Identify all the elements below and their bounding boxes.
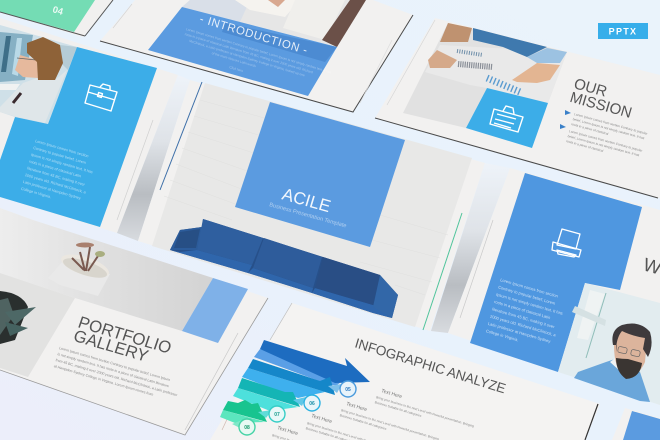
blue accent block: [182, 278, 248, 343]
photo: man in profile: [0, 25, 77, 124]
chart: arrow funnel: [220, 340, 370, 435]
panel: bottom right slide corner: [612, 408, 660, 440]
blue panel: [148, 7, 337, 96]
text block: item one: Bring your business to the next Level with Powerful presentation. Bringing: [376, 395, 475, 428]
text block: left slide body: College in Virginia.: [20, 187, 52, 199]
text block: introduction body: Click here: [229, 65, 244, 73]
text block: right slide body: 2000 years old. Richard McClintock, a: [490, 314, 557, 338]
photo: bearded man: [558, 283, 660, 405]
text block: item two: Business Suitable for all categories: [339, 413, 387, 431]
sofa: [170, 219, 398, 318]
text block: left slide body: Contrary to popular belief, Lorem: [33, 146, 86, 165]
text block: right slide body: roots in a piece of classical Latin: [494, 299, 551, 320]
heading: introduction: - INTRODUCTION -: [198, 13, 309, 57]
panel: center title slide: [138, 80, 485, 331]
text block: left slide body: Latin professor at Hampden-Sydney: [22, 180, 81, 200]
photo: succulent on pedestal: [0, 208, 213, 331]
text block: mission body: roots in a piece of classical: [566, 139, 604, 153]
text block: item three: [305, 413, 394, 440]
tie: [13, 93, 21, 103]
panel: right blue slide: [448, 168, 660, 405]
text block: mission body: Lorem Ipsum comes from section Contrary to popular: [574, 112, 649, 136]
blue panel: [0, 47, 157, 227]
panel: portfolio gallery slide: [0, 208, 268, 435]
panel: green slide: [0, 0, 113, 37]
text block: left slide body: 2000 years old. Richard McClintock, a: [25, 173, 87, 195]
text block: mission body: roots in a piece of classical: [571, 122, 609, 136]
text block: item four: Text Here: [276, 425, 299, 437]
shirt: [0, 70, 67, 123]
icon: clipboard: [490, 106, 523, 132]
circle labels: [239, 381, 356, 435]
heading: portfolio gallery: GALLERY: [71, 326, 151, 366]
text block: left slide body: Lorem Ipsum comes from section: [35, 139, 89, 158]
circle labels: 05: [345, 387, 351, 393]
text block: right slide body: Ipsum is not simply random text. It has: [496, 292, 563, 316]
badge: PPTX: [598, 23, 648, 39]
text block: item one: Text Here: [380, 388, 403, 400]
heading: portfolio gallery: PORTFOLIO: [76, 313, 174, 358]
heading: our mission: MISSION: [568, 89, 634, 122]
text block: introduction body: McClintock, a Latin professor at Hampden-Sydney College in Virginia, looked up one: [189, 39, 306, 77]
text block: introduction body: of the more obscure Latin words: [211, 51, 257, 68]
shadow: between center and right slide: [431, 163, 510, 333]
circle labels: 07: [274, 412, 280, 418]
text block: mission body: belief, Lorem Ipsum is not simply random text. It has: [572, 117, 645, 140]
text block: left slide body: roots in a piece of classical Latin: [29, 160, 82, 178]
hair: [27, 37, 63, 80]
blue title card: [235, 102, 405, 247]
text block: introduction body: Lorem Ipsum comes from section Contrary to popular belief, Lorem Ipsum is not simply random text. It has: [186, 27, 332, 75]
text block: item four: [272, 425, 328, 440]
photo: brick wall: [152, 83, 472, 327]
text block: item three: Text Here: [310, 413, 333, 425]
badge: PPTX: PPTX: [609, 26, 637, 36]
text block: portfolio body: from 45 BC, making it over 2000 years old. Richard McClintock, a Latin professor: [55, 358, 178, 397]
circle labels: 06: [309, 401, 315, 407]
photo: office desk: [182, 0, 366, 47]
text block: item one: Business Suitable for all categories: [374, 400, 422, 418]
text block: right slide body: literature from 45 BC, making it over: [492, 306, 556, 329]
text block: introduction body: roots in a piece of classical Latin literature from 45 BC, making it over 2000 years old. Richard: [184, 32, 314, 74]
icon: briefcase: [85, 84, 117, 111]
text block: left slide body: literature from 45 BC, making it over: [27, 166, 86, 187]
text block: right slide body: Contrary to popular belief, Lorem: [498, 284, 557, 306]
text block: mission body: belief, Lorem Ipsum is not simply random text. It has: [567, 134, 640, 157]
panel: infographic analyze slide: [210, 303, 600, 440]
text block: mission body: Lorem Ipsum comes from section Contrary to popular: [569, 129, 644, 153]
text block: right slide body: Lorem Ipsum comes from section: [500, 277, 559, 299]
text block: left slide body: Ipsum is not simply random text. It has: [31, 153, 93, 174]
panel: our mission slide: [375, 18, 660, 198]
blue panel: [470, 173, 642, 372]
circle labels: 08: [244, 425, 250, 431]
photo: dark succulent: [0, 273, 75, 377]
text block: portfolio body: at Hampden-Sydney College in Virginia. Lorem Ipsum comes from: [53, 364, 154, 397]
text block: right slide body: College in Virginia.: [485, 328, 519, 342]
icon: bullets: [560, 110, 571, 129]
panel: green slide: 04: [51, 3, 65, 17]
title: ACILE: ACILE: [280, 184, 333, 216]
subtitle: Business Presentation Template: [268, 202, 347, 229]
shadow: between left and center slide: [117, 75, 190, 241]
photo: hands over charts: [403, 23, 567, 128]
text block: right slide body: Latin professor at Hampden-Sydney: [487, 321, 552, 344]
face: [15, 55, 38, 78]
blue icon tile: [466, 88, 548, 148]
text block: portfolio body: Lorem Ipsum comes from section Contrary to popular belief, Lorem Ipsum: [59, 346, 171, 382]
panel: introduction slide: [100, 0, 413, 112]
heading: our mission: OUR: [572, 75, 609, 101]
text block: item two: Text Here: [345, 401, 368, 413]
panel: left blue slide: [0, 18, 178, 233]
icon: printer: [552, 229, 581, 257]
heading: infographic analyze: INFOGRAPHIC ANALYZE: [353, 336, 507, 396]
text block: portfolio body: is not simply random text. It has roots in a piece of classical Latin literature: [57, 352, 170, 388]
